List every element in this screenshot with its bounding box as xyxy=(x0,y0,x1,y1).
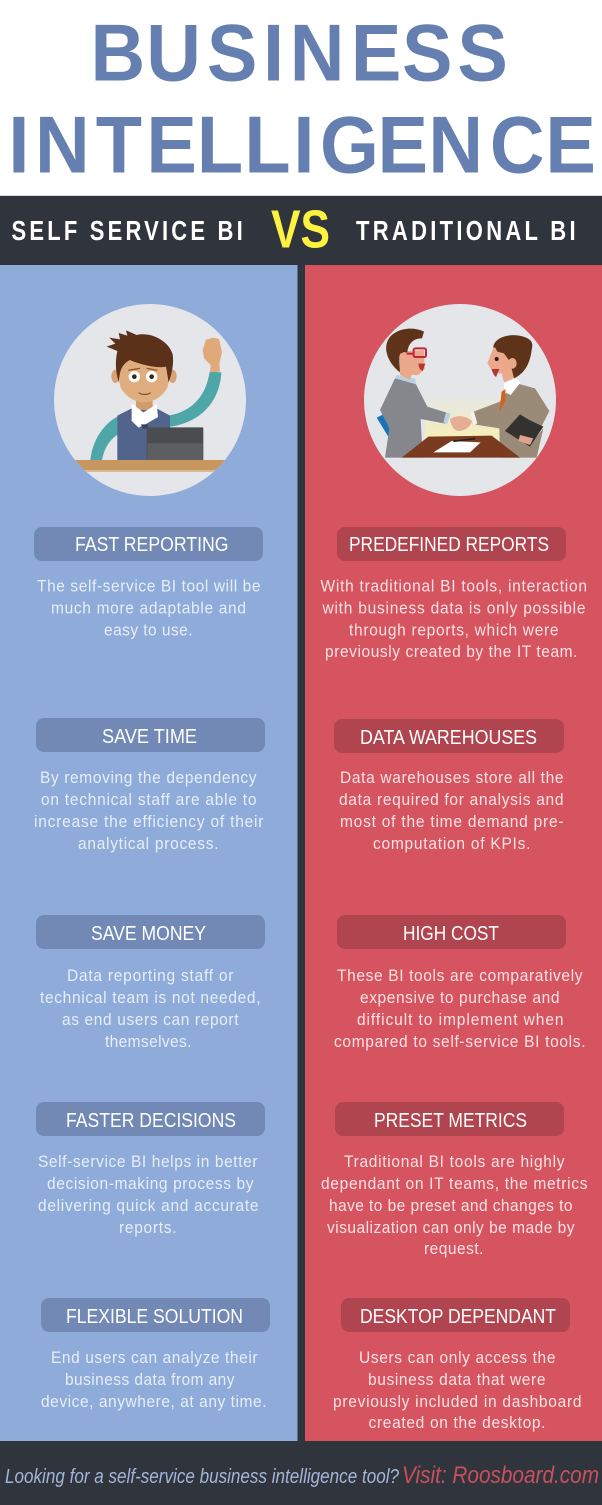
item: desktop dependant: created on the desktop. xyxy=(368,1415,546,1432)
item: faster decisions: delivering quick and accurate xyxy=(38,1198,259,1215)
item: save time: SAVE TIME xyxy=(102,726,197,748)
icon: man with tablet waving xyxy=(54,304,246,496)
heading: versus: VS xyxy=(271,200,330,260)
item: faster decisions: FASTER DECISIONS xyxy=(66,1110,236,1132)
item: predefined reports: through reports, which were xyxy=(349,622,559,640)
item: fast reporting: easy to use. xyxy=(104,622,193,640)
item: high cost: These BI tools are comparatively xyxy=(337,968,583,985)
item: faster decisions: reports. xyxy=(119,1220,177,1237)
item: save money xyxy=(36,915,265,1051)
title xyxy=(8,7,596,190)
heading: self service: SELF SERVICE BI xyxy=(12,216,243,247)
item: save money: Data reporting staff or xyxy=(67,968,234,985)
item: desktop dependant: business data that were xyxy=(368,1372,546,1389)
item: high cost: HIGH COST xyxy=(403,923,499,945)
item: preset metrics: dependant on IT teams, the metrics xyxy=(321,1176,587,1193)
item: predefined reports: previously created by the IT team. xyxy=(325,644,577,661)
item: preset metrics: Traditional BI tools are highly xyxy=(344,1154,565,1171)
footer call to action xyxy=(5,1462,599,1489)
item: faster decisions xyxy=(36,1102,265,1237)
item: fast reporting: much more adaptable and xyxy=(51,600,246,618)
item: data warehouses: Data warehouses store all the xyxy=(340,770,564,787)
panel: traditional BI xyxy=(305,265,602,1441)
item: save time: analytical process. xyxy=(78,836,219,853)
item: desktop dependant: previously included in dashboard xyxy=(333,1394,582,1411)
item: fast reporting: The self-service BI tool will be xyxy=(37,578,261,596)
item: desktop dependant: Users can only access the xyxy=(359,1350,556,1367)
item: save time: on technical staff are able to xyxy=(41,792,257,809)
item: data warehouses: data required for analysis and xyxy=(339,792,563,809)
item: preset metrics: request. xyxy=(424,1241,484,1258)
item: preset metrics: have to be preset and changes to xyxy=(329,1198,573,1215)
item: save money: as end users can report xyxy=(62,1012,239,1029)
item: high cost: compared to self-service BI tools. xyxy=(334,1034,586,1051)
item: save time: By removing the dependency xyxy=(40,770,256,787)
item: flexible solution: FLEXIBLE SOLUTION xyxy=(66,1306,243,1328)
panel: self service BI xyxy=(0,265,298,1441)
item: preset metrics: visualization can only be made by xyxy=(327,1220,575,1237)
comparison header band xyxy=(0,195,602,265)
item: flexible solution: End users can analyze their xyxy=(51,1350,258,1367)
footer call to action: Looking for a self-service business intelligence tool? xyxy=(5,1466,400,1488)
item: save money: SAVE MONEY xyxy=(91,923,206,945)
item: data warehouses xyxy=(334,719,564,853)
item: save time xyxy=(34,718,265,853)
item: flexible solution: business data from any xyxy=(65,1372,234,1389)
item: data warehouses: most of the time demand pre- xyxy=(340,814,564,831)
item: predefined reports: PREDEFINED REPORTS xyxy=(349,534,549,556)
item: predefined reports: With traditional BI tools, interaction xyxy=(320,578,587,596)
item: save money: themselves. xyxy=(105,1034,191,1051)
item: save money: technical team is not needed, xyxy=(40,990,261,1007)
item: data warehouses: DATA WAREHOUSES xyxy=(360,727,537,749)
item: desktop dependant xyxy=(333,1298,582,1432)
heading: traditional: TRADITIONAL BI xyxy=(356,216,576,247)
item: fast reporting xyxy=(34,527,263,640)
item: fast reporting: FAST REPORTING xyxy=(75,534,228,556)
item: high cost xyxy=(334,915,586,1051)
item: data warehouses: computation of KPIs. xyxy=(373,836,530,853)
item: predefined reports xyxy=(320,527,587,661)
item: predefined reports: with business data is only possible xyxy=(322,600,586,618)
title: INTELLIGENCE xyxy=(8,99,596,190)
item: high cost: difficult to implement when xyxy=(357,1012,564,1029)
item: faster decisions: Self-service BI helps in better xyxy=(38,1154,258,1171)
item: desktop dependant: DESKTOP DEPENDANT xyxy=(360,1306,556,1328)
item: preset metrics: PRESET METRICS xyxy=(374,1110,527,1132)
item: preset metrics xyxy=(321,1102,587,1258)
item: save time: increase the efficiency of their xyxy=(34,814,264,831)
item: flexible solution: device, anywhere, at any time. xyxy=(41,1394,267,1411)
title: BUSINESS xyxy=(90,7,508,98)
item: flexible solution xyxy=(41,1298,270,1411)
item: high cost: expensive to purchase and xyxy=(360,990,559,1007)
item: faster decisions: decision-making process by xyxy=(47,1176,254,1193)
icon: two businessmen shaking hands xyxy=(364,304,556,496)
